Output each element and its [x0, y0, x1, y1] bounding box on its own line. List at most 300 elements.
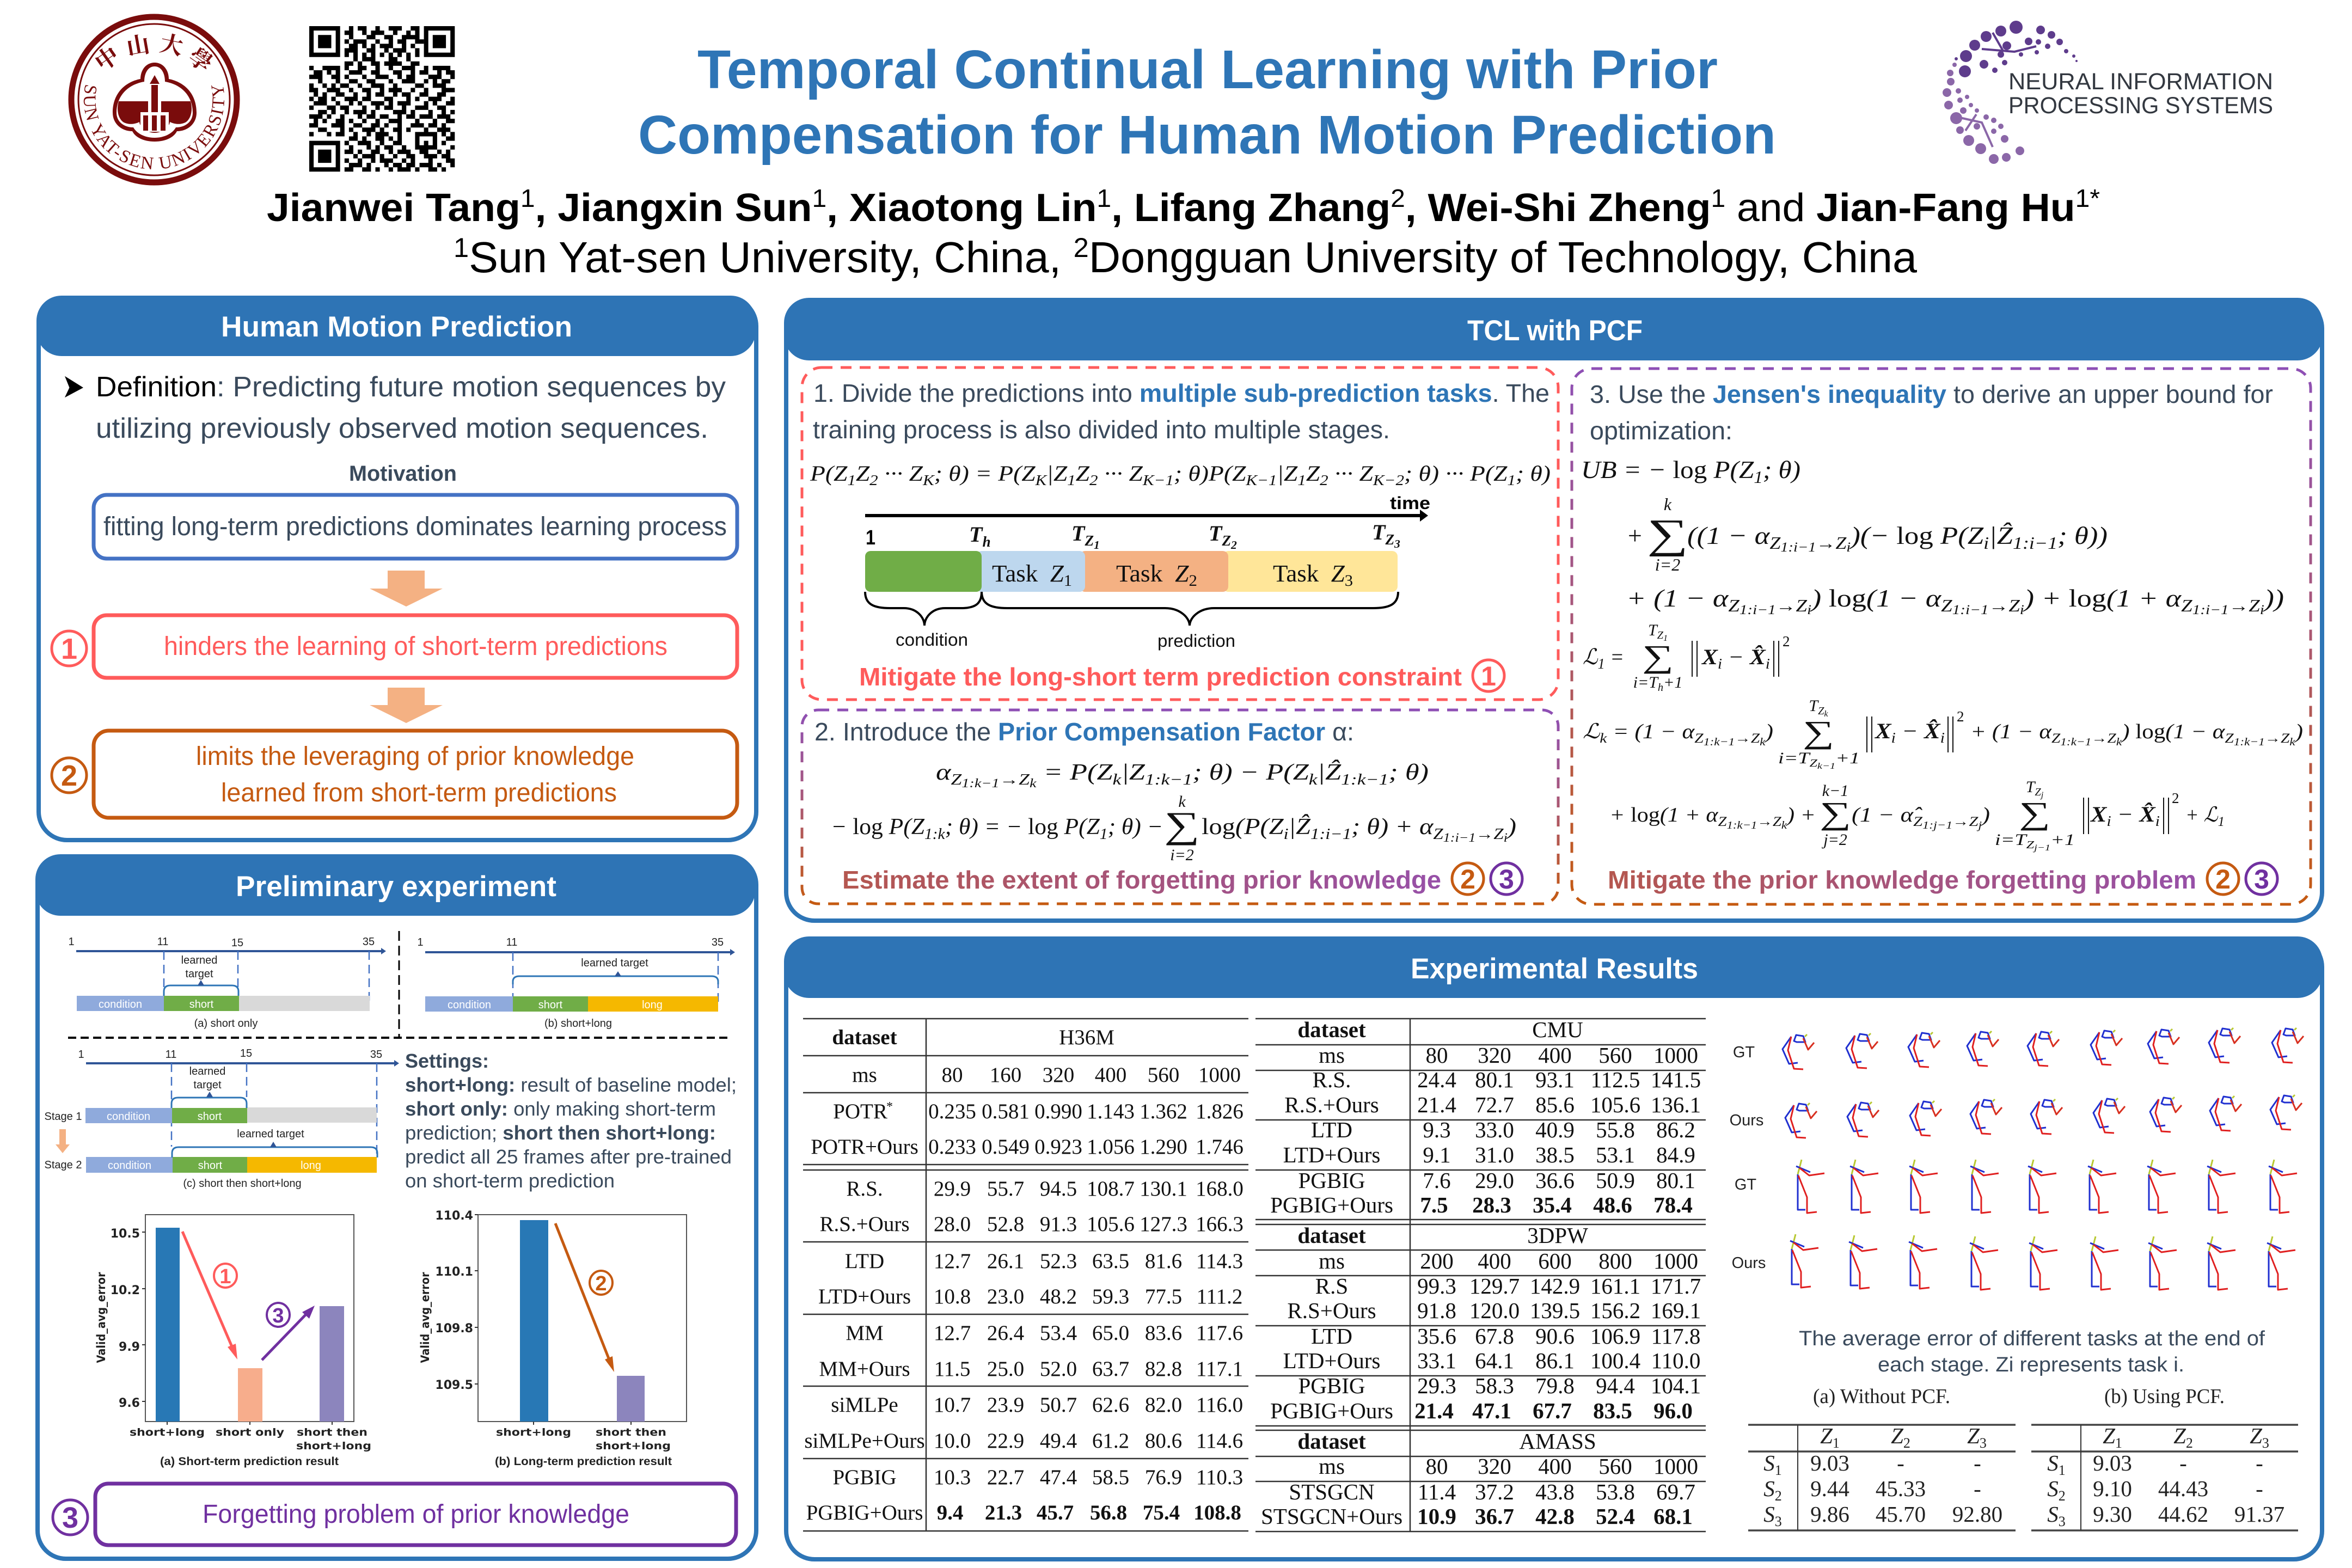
table: CMU, 3DPW, AMASS: 64.1: [1475, 1348, 1514, 1373]
equation: Lk: ): [2294, 720, 2303, 743]
bar chart: short-term prediction result: 3: [272, 1304, 284, 1327]
table: using PCF: S: [2047, 1502, 2059, 1527]
equation: upper bound: ) + log(1 + α: [2024, 584, 2170, 612]
bar chart: long-term prediction result: (b) Long-term prediction result: [495, 1455, 672, 1468]
equation: Lk continued: j: [1976, 819, 1982, 831]
equation: L1: Z: [1657, 629, 1664, 641]
table: CMU, 3DPW, AMASS: 1000: [1653, 1248, 1698, 1273]
table: CMU, 3DPW, AMASS: 100.4: [1590, 1348, 1640, 1373]
table: CMU, 3DPW, AMASS: 9.1: [1423, 1142, 1451, 1167]
equation: chain rule: Z: [1306, 461, 1320, 486]
affiliations: 1: [454, 232, 469, 263]
table: using PCF: 91.37: [2234, 1502, 2284, 1527]
heading: TCL with PCF: [1467, 315, 1643, 347]
equation: upper bound: →Z: [1816, 534, 1847, 553]
bar chart: long-term prediction result: 109.8: [435, 1322, 473, 1336]
table: using PCF: 9.10: [2093, 1476, 2132, 1501]
definition text: Definition: Predicting future motion sequences by: [96, 371, 726, 403]
table: using PCF: 9.30: [2093, 1502, 2132, 1527]
table: H36M: 75.4: [1143, 1501, 1180, 1524]
table: using PCF: 3: [2262, 1435, 2269, 1451]
equation: Lk continued: + log(1 + α: [1609, 804, 1712, 826]
table: CMU, 3DPW, AMASS: 53.8: [1596, 1479, 1635, 1504]
conclusion 3: 3: [2254, 864, 2269, 895]
table: CMU, 3DPW, AMASS: 69.7: [1656, 1479, 1695, 1504]
diagram: short+long: 35: [712, 936, 724, 948]
authors: , Wei-Shi Zheng: [1405, 186, 1711, 230]
table: H36M: 1.362: [1140, 1100, 1187, 1123]
logo: Sun Yat-sen University seal: 大: [157, 31, 185, 60]
logo: NeurIPS: PROCESSING SYSTEMS: [2008, 93, 2273, 119]
table: H36M: 80: [942, 1063, 963, 1087]
table: H36M: 29.9: [934, 1177, 971, 1200]
equation: negative log: 1:k: [924, 826, 946, 843]
equation: upper bound: i: [1846, 540, 1851, 555]
authors: , Jiangxin Sun: [535, 186, 812, 230]
box: limits: learned from short-term predictions: [221, 779, 617, 807]
arrow down: [370, 571, 443, 607]
table: CMU, 3DPW, AMASS: PGBIG: [1298, 1168, 1365, 1193]
table: CMU, 3DPW, AMASS: 120.0: [1469, 1298, 1520, 1323]
equation: alpha: Z: [951, 771, 963, 788]
authors: and: [1725, 186, 1816, 230]
heading: Human Motion Prediction: [221, 311, 572, 343]
equation: Lk: 2: [1957, 708, 1964, 725]
settings text: prediction; short then short+long:: [405, 1122, 716, 1144]
bar chart: long-term prediction result: [419, 1209, 687, 1468]
table: H36M: 0.549: [982, 1135, 1030, 1159]
table: CMU, 3DPW, AMASS: 136.1: [1651, 1092, 1701, 1117]
equation: negative log: ; θ) + α: [1351, 814, 1434, 840]
equation: L1: 1: [1663, 633, 1668, 643]
table: CMU, 3DPW, AMASS: 94.4: [1596, 1373, 1635, 1398]
table: without PCF: 2: [1903, 1435, 1910, 1451]
equation: alpha: ; θ) − P(Z: [1192, 760, 1309, 785]
table: CMU, 3DPW, AMASS: 67.8: [1475, 1324, 1514, 1349]
table: H36M: 76.9: [1145, 1466, 1182, 1489]
equation: Lk continued: i: [2155, 813, 2160, 829]
table: H36M: 21.3: [985, 1501, 1022, 1524]
table: H36M: 22.9: [987, 1429, 1024, 1453]
bar chart: short-term prediction result: [95, 1215, 371, 1468]
equation: Lk continued: j: [2040, 790, 2044, 800]
equation: Lk: →Z: [2265, 730, 2290, 746]
equation: upper bound: )): [2262, 584, 2284, 612]
bar chart: long-term prediction result: short+long: [496, 1426, 571, 1438]
table: CMU, 3DPW, AMASS: 21.4: [1414, 1398, 1454, 1423]
equation: Lk: Z: [2225, 730, 2234, 746]
table: without PCF: 1: [1833, 1435, 1840, 1451]
box: fitting long-term: fitting long-term predictions dominates learning process: [103, 512, 727, 541]
diagram: task timeline: T: [969, 522, 982, 547]
box: fitting long-term: [94, 495, 737, 559]
equation: upper bound: 1:i−1: [2013, 534, 2057, 553]
equation: Lk: [1583, 697, 2303, 771]
table: CMU, 3DPW, AMASS: 78.4: [1653, 1192, 1693, 1217]
table: H36M: 117.6: [1196, 1321, 1243, 1345]
caption: average error: The average error of different tasks at the end of: [1799, 1327, 2265, 1350]
diagram: short then short+long: condition: [107, 1111, 150, 1123]
bar chart: long-term prediction result: short+long: [596, 1440, 671, 1452]
equation: alpha: α: [936, 760, 948, 785]
bar chart: long-term prediction result: 110.1: [435, 1265, 473, 1279]
equation: alpha: |Ẑ: [1318, 759, 1342, 785]
table: without PCF: 2: [1775, 1488, 1782, 1504]
table: H36M: 23.0: [987, 1285, 1024, 1308]
table: without PCF: 3: [1775, 1514, 1782, 1529]
table: H36M: MM+Ours: [819, 1357, 910, 1381]
table: CMU, 3DPW, AMASS: 400: [1538, 1454, 1572, 1479]
equation: chain rule: 1: [1297, 472, 1306, 488]
equation: upper bound: ; θ)): [2057, 522, 2108, 549]
table: CMU, 3DPW, AMASS: 141.5: [1651, 1067, 1701, 1092]
badge 2: [52, 758, 87, 793]
table: H36M: 1.746: [1196, 1135, 1244, 1159]
diagram: short only: learned: [181, 954, 217, 966]
caption: average error: each stage. Zi represents task i.: [1878, 1353, 2184, 1376]
table: using PCF: (b) Using PCF.: [2104, 1385, 2225, 1408]
equation: upper bound: →Z: [2228, 596, 2260, 615]
table: CMU, 3DPW, AMASS: 171.7: [1651, 1273, 1701, 1298]
diagram: task timeline: time: [1390, 493, 1430, 513]
table: CMU, 3DPW, AMASS: 80: [1425, 1454, 1448, 1479]
equation: alpha: = P(Z: [1037, 760, 1113, 785]
equation: negative log: i: [1504, 831, 1508, 844]
diagram: short+long: 11: [506, 936, 517, 948]
table: using PCF: Z: [2173, 1423, 2186, 1448]
table: CMU, 3DPW, AMASS: ms: [1319, 1248, 1345, 1273]
equation: Lk continued: →Z: [1952, 813, 1979, 829]
table: using PCF: 1: [2059, 1462, 2066, 1478]
table: H36M: 49.4: [1040, 1429, 1077, 1453]
equation: Lk continued: i: [2106, 813, 2111, 829]
equation: Lk: i: [1940, 730, 1945, 746]
equation: chain rule: 2: [869, 472, 878, 488]
equation: Lk: ) log(1 − α: [2122, 720, 2218, 743]
bar chart: short-term prediction result: 9.6: [119, 1396, 140, 1410]
table: H36M: 130.1: [1140, 1177, 1187, 1200]
table: H36M: 83.6: [1145, 1321, 1182, 1345]
diagram: short only: 15: [231, 937, 243, 949]
equation: Lk continued: +1: [2050, 831, 2075, 849]
equation: chain rule: K: [1035, 472, 1048, 488]
table: without PCF: 9.03: [1810, 1450, 1849, 1475]
table: H36M: 77.5: [1145, 1285, 1182, 1308]
diagram: short only: (a) short only: [194, 1018, 258, 1030]
bar chart: short-term prediction result: (a) Short-term prediction result: [160, 1455, 339, 1468]
authors: , Lifang Zhang: [1111, 186, 1391, 230]
table: H36M: 108.7: [1087, 1177, 1135, 1200]
table: CMU, 3DPW, AMASS: R.S+Ours: [1287, 1298, 1376, 1323]
table: CMU, 3DPW, AMASS: 105.6: [1590, 1092, 1640, 1117]
equation: negative log: Z: [1433, 826, 1444, 843]
caption: average error: [1799, 1327, 2265, 1376]
equation: Lk: i=T: [1778, 749, 1803, 767]
table: CMU, 3DPW, AMASS: PGBIG+Ours: [1270, 1398, 1393, 1423]
affiliations: Dongguan University of Technology, China: [1089, 233, 1918, 281]
table: without PCF: -: [1974, 1450, 1981, 1475]
table: H36M: 560: [1148, 1063, 1179, 1087]
figure: motion skeleton comparison: GT: [1733, 1044, 1755, 1061]
equation: alpha: k: [1309, 771, 1318, 788]
table: without PCF: (a) Without PCF.: [1813, 1385, 1950, 1408]
table: CMU, 3DPW, AMASS: 84.9: [1656, 1142, 1695, 1167]
equation: Lk: ℒ: [1583, 720, 1597, 743]
table: H36M: 94.5: [1040, 1177, 1077, 1200]
equation: negative log: i: [1284, 826, 1289, 843]
table: CMU, 3DPW, AMASS: ms: [1319, 1454, 1345, 1479]
logo: Sun Yat-sen University seal: 山: [125, 32, 151, 60]
equation: Lk continued: j=2: [1821, 831, 1847, 849]
table: H36M: 80.6: [1145, 1429, 1182, 1453]
table: H36M: 59.3: [1092, 1285, 1129, 1308]
table: CMU, 3DPW, AMASS: CMU: [1532, 1017, 1583, 1042]
equation: upper bound: i: [2260, 603, 2264, 617]
table: H36M: PGBIG: [832, 1466, 897, 1489]
bar chart: short-term prediction result: short only: [216, 1426, 285, 1438]
equation: upper bound: 1:i−1: [1952, 603, 1989, 617]
logo: Sun Yat-sen University seal: 學: [183, 43, 217, 77]
box: forgetting problem: [95, 1484, 736, 1545]
table: CMU, 3DPW, AMASS: 55.8: [1596, 1117, 1635, 1142]
table: CMU, 3DPW, AMASS: LTD+Ours: [1283, 1142, 1380, 1167]
table: H36M: 53.4: [1040, 1321, 1077, 1345]
equation: Lk: + (1 − α: [1970, 720, 2042, 743]
diagram: task timeline: Z: [1084, 532, 1094, 549]
diagram: task timeline: T: [1209, 521, 1222, 546]
diagram: short then short+long: Stage 2: [45, 1159, 82, 1171]
equation: L1: +1: [1663, 673, 1682, 691]
table: H36M: 56.8: [1090, 1501, 1127, 1524]
diagram: task timeline: Z: [1221, 532, 1231, 549]
table: using PCF: 2: [2186, 1435, 2193, 1451]
diagram: short then short+long: 1: [78, 1049, 84, 1061]
bar chart: short-term prediction result: short then: [297, 1426, 367, 1438]
table: CMU, 3DPW, AMASS: 800: [1598, 1248, 1632, 1273]
table: CMU, 3DPW, AMASS: 35.6: [1417, 1324, 1456, 1349]
table: CMU, 3DPW, AMASS: 3DPW: [1527, 1223, 1588, 1248]
equation: upper bound: k: [1664, 494, 1672, 514]
equation: Lk continued: [1609, 778, 2225, 853]
equation: chain rule: K: [922, 472, 935, 488]
table: H36M: 0.233: [928, 1135, 976, 1159]
table: CMU, 3DPW, AMASS: R.S.: [1313, 1067, 1351, 1092]
table: H36M: 28.0: [934, 1212, 971, 1236]
table: CMU, 3DPW, AMASS: 110.0: [1651, 1348, 1700, 1373]
equation: upper bound: Z: [1769, 534, 1781, 553]
table: without PCF: Z: [1891, 1423, 1904, 1448]
table: CMU, 3DPW, AMASS: 90.6: [1535, 1324, 1575, 1349]
equation: negative log: ; θ) = − log P(Z: [945, 814, 1098, 840]
table: H36M: 400: [1095, 1063, 1126, 1087]
table: H36M: *: [886, 1100, 893, 1114]
table: CMU, 3DPW, AMASS: 52.4: [1596, 1504, 1635, 1529]
table: CMU, 3DPW, AMASS: 24.4: [1417, 1067, 1456, 1092]
motivation label: Motivation: [349, 462, 457, 486]
diagram: task timeline: h: [982, 534, 991, 550]
table: H36M: 26.1: [987, 1250, 1024, 1273]
diagram: short only: short: [189, 999, 214, 1010]
table: CMU, 3DPW, AMASS: STSGCN+Ours: [1261, 1504, 1402, 1529]
diagram: short then short+long: Stage 1: [45, 1111, 82, 1123]
table: without PCF: 1: [1775, 1462, 1782, 1478]
diagram: short only: target: [185, 968, 213, 980]
table: CMU, 3DPW, AMASS: 42.8: [1535, 1504, 1575, 1529]
table: CMU, 3DPW, AMASS: 31.0: [1475, 1142, 1514, 1167]
diagram: short then short+long: (c) short then short+long: [183, 1178, 302, 1190]
definition text: utilizing previously observed motion sequences.: [96, 413, 708, 444]
table: H36M: 26.4: [987, 1321, 1024, 1345]
table: H36M: LTD+Ours: [818, 1285, 911, 1308]
equation: Lk continued: T: [2026, 778, 2035, 796]
equation: Lk continued: k−1: [1822, 782, 1848, 800]
bar chart: long-term prediction result: 110.4: [435, 1209, 473, 1223]
equation: Lk: T: [1809, 697, 1818, 715]
table: H36M: 10.0: [934, 1429, 971, 1453]
heading: Preliminary experiment: [236, 871, 556, 903]
equation: chain rule: 1: [1067, 472, 1076, 488]
table: H36M: 1.826: [1196, 1100, 1244, 1123]
table: CMU, 3DPW, AMASS: 104.1: [1651, 1373, 1701, 1398]
authors: 1: [1711, 184, 1725, 212]
table: H36M: 1.290: [1140, 1135, 1187, 1159]
sub-panel 2: prior compensation factor: [802, 710, 1558, 904]
diagram: short then short+long: condition: [108, 1160, 151, 1172]
table: H36M: H36M: [1059, 1026, 1114, 1049]
bar chart: short-term prediction result: 10.2: [111, 1284, 140, 1297]
badge 3: 3: [62, 1502, 78, 1534]
table: CMU, 3DPW, AMASS: 169.1: [1651, 1298, 1701, 1323]
conclusion 2: 3: [1499, 864, 1514, 895]
table: H36M: 65.0: [1092, 1321, 1129, 1345]
equation: negative log: 1: [1100, 826, 1108, 843]
figure: motion skeleton comparison: [1730, 1028, 2304, 1290]
table: using PCF: 3: [2059, 1514, 2066, 1529]
diagram: short only: [68, 936, 386, 1030]
table: CMU, 3DPW, AMASS: 1000: [1653, 1454, 1698, 1479]
table: H36M: 10.3: [934, 1466, 971, 1489]
table: CMU, 3DPW, AMASS: 129.7: [1469, 1273, 1520, 1298]
equation: alpha: 1:k−1: [961, 776, 1000, 790]
table: H36M: 111.2: [1197, 1285, 1242, 1308]
step 1 text: 1. Divide the predictions into multiple sub-prediction tasks. The: [813, 379, 1549, 407]
equation: negative log: ): [1506, 814, 1516, 840]
bar chart: long-term prediction result: short then: [596, 1426, 666, 1438]
equation: Lk: 1:k−1: [2234, 736, 2265, 748]
diagram: short+long: 1: [417, 936, 424, 948]
table: without PCF: [1748, 1385, 2016, 1530]
authors: , Xiaotong Lin: [826, 186, 1097, 230]
equation: Lk: +1: [1835, 749, 1860, 767]
badge 2: 2: [61, 759, 77, 792]
equation: negative log: k: [1178, 793, 1186, 811]
logo: Sun Yat-sen University seal: [69, 14, 240, 185]
table: H36M: siMLPe+Ours: [804, 1429, 925, 1453]
equation: chain rule: 2: [1089, 472, 1098, 488]
table: CMU, 3DPW, AMASS: dataset: [1297, 1429, 1366, 1454]
equation: Lk: →Z: [1735, 730, 1760, 746]
table: without PCF: -: [1897, 1450, 1904, 1475]
table: H36M: 110.3: [1196, 1466, 1243, 1489]
logo: Sun Yat-sen University seal: 中: [91, 42, 124, 76]
table: H36M: 12.7: [934, 1250, 971, 1273]
table: CMU, 3DPW, AMASS: PGBIG: [1298, 1373, 1365, 1398]
diagram: short+long: long: [642, 999, 663, 1011]
table: CMU, 3DPW, AMASS: 47.1: [1472, 1398, 1511, 1423]
step 3 text: [1590, 380, 2273, 445]
table: CMU, 3DPW, AMASS: LTD: [1311, 1117, 1352, 1142]
equation: chain rule: K−1: [1245, 472, 1277, 488]
table: CMU, 3DPW, AMASS: 33.1: [1417, 1348, 1456, 1373]
table: without PCF: Z: [1967, 1423, 1980, 1448]
authors: 1: [520, 184, 535, 212]
equation: chain rule: 2: [1320, 472, 1328, 488]
equation: L1: h: [1658, 682, 1663, 694]
table: CMU, 3DPW, AMASS: 53.1: [1596, 1142, 1635, 1167]
table: CMU, 3DPW, AMASS: AMASS: [1519, 1429, 1596, 1454]
conclusion 2: Estimate the extent of forgetting prior knowledge: [842, 866, 1441, 894]
table: H36M: 47.4: [1040, 1466, 1077, 1489]
equation: upper bound: )(− log P(Z: [1851, 522, 1977, 549]
table: using PCF: S: [2047, 1476, 2059, 1501]
equation: L1: =: [1605, 645, 1624, 669]
equation: negative log: [831, 793, 1516, 864]
conclusion 1: 1: [1481, 661, 1496, 691]
equation: Lk: k: [1760, 736, 1766, 748]
table: H36M: 117.1: [1196, 1357, 1243, 1381]
equation: Lk continued: X: [2090, 802, 2108, 826]
equation: L1: i: [1718, 656, 1722, 672]
table: CMU, 3DPW, AMASS: 200: [1420, 1248, 1454, 1273]
diagram: short then short+long: learned: [189, 1065, 225, 1077]
bar chart: short-term prediction result: short+long: [296, 1440, 371, 1452]
bar chart: short-term prediction result: 10.5: [111, 1227, 140, 1241]
equation: alpha: ; θ): [1388, 760, 1429, 785]
equation: upper bound: Z: [1728, 596, 1740, 615]
QR code: [309, 26, 455, 171]
equation: alpha: 1:k−1: [1145, 771, 1192, 788]
equation: upper bound: ∑: [1647, 511, 1688, 556]
table: CMU, 3DPW, AMASS: 80.1: [1656, 1168, 1695, 1193]
equation: chain rule: ; θ) ··· P(Z: [1404, 461, 1508, 486]
equation: Lk: Z: [1810, 757, 1818, 769]
equation: upper bound: i: [2020, 603, 2024, 617]
equation: L1: 2: [1783, 633, 1790, 650]
authors: 2: [1391, 184, 1405, 212]
equation: chain rule: 1: [847, 472, 856, 488]
diagram: short only: 35: [363, 936, 375, 948]
box: limits: [94, 731, 737, 818]
authors: 1*: [2075, 184, 2100, 212]
box: hinders: [94, 615, 737, 678]
settings text: short only: only making short-term: [405, 1098, 716, 1120]
diagram: short+long: condition: [448, 999, 491, 1011]
diagram: task timeline: Z: [1385, 531, 1394, 548]
equation: Lk continued: ∑: [1820, 796, 1851, 831]
table: CMU, 3DPW, AMASS: 161.1: [1590, 1273, 1640, 1298]
table: CMU, 3DPW, AMASS: 28.3: [1472, 1192, 1511, 1217]
table: without PCF: Z: [1820, 1423, 1833, 1448]
table: H36M: 166.3: [1196, 1212, 1244, 1236]
title: Compensation for Human Motion Prediction: [638, 105, 1776, 166]
conclusion 2: 2: [1460, 864, 1475, 895]
table: using PCF: Z: [2103, 1423, 2116, 1448]
table: H36M: 105.6: [1087, 1212, 1135, 1236]
table: CMU, 3DPW, AMASS: 99.3: [1417, 1273, 1456, 1298]
equation: chain rule: 1: [1507, 472, 1516, 488]
table: without PCF: 9.44: [1810, 1476, 1849, 1501]
equation: chain rule: ··· Z: [1098, 461, 1143, 486]
